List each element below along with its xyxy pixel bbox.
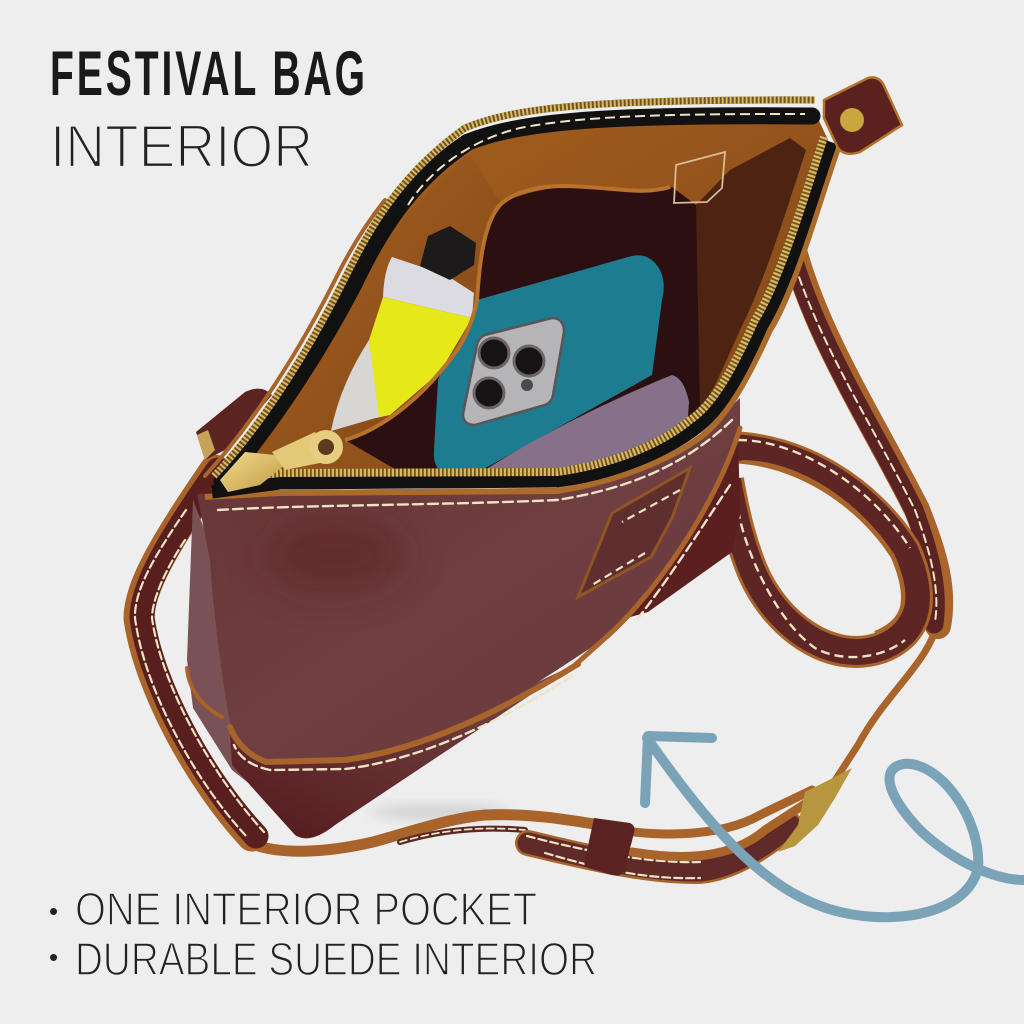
bag back panel <box>640 190 812 470</box>
subtitle: interior: INTERIOR <box>50 113 313 180</box>
pocket edge highlight <box>345 186 670 440</box>
title: festival bag: FESTIVAL BAG <box>50 40 365 109</box>
top right leather tab with rivet <box>824 77 902 154</box>
camera module <box>463 318 564 425</box>
strap loop behind bag <box>725 440 917 657</box>
soft floor shadow <box>370 805 510 819</box>
seam and stitching on bag <box>187 420 740 770</box>
lower right gusset <box>620 430 740 620</box>
phone <box>434 255 664 470</box>
bullet: one interior pocket: • <box>49 896 58 926</box>
bullet: durable suede interior: DURABLE SUEDE INTERIOR <box>75 933 597 985</box>
stitched label outline <box>674 152 725 203</box>
top zipper <box>205 100 815 482</box>
left strap tab <box>196 389 272 460</box>
interior pocket <box>345 186 700 472</box>
bullet: durable suede interior: • <box>49 942 58 972</box>
interior suede lining <box>210 111 828 490</box>
adjuster strap section <box>527 790 812 878</box>
zipper pull <box>220 430 343 492</box>
bullet list <box>49 883 597 985</box>
left body panel <box>187 500 270 800</box>
front strap <box>135 470 600 851</box>
purple wallet <box>482 375 689 472</box>
bullet: one interior pocket: ONE INTERIOR POCKET <box>75 883 537 935</box>
front pocket flap suede <box>232 155 501 482</box>
right zipper and tape <box>205 137 838 497</box>
dark right wall <box>640 138 806 440</box>
body shading <box>265 520 405 590</box>
buckle <box>778 768 852 852</box>
lotion tube <box>331 226 476 431</box>
front body panel <box>197 398 740 764</box>
blue arrow <box>645 736 1024 917</box>
lower bag panel <box>230 662 580 838</box>
back shoulder strap <box>787 235 940 785</box>
leather logo patch <box>578 468 690 597</box>
strap keeper loop <box>584 818 634 876</box>
